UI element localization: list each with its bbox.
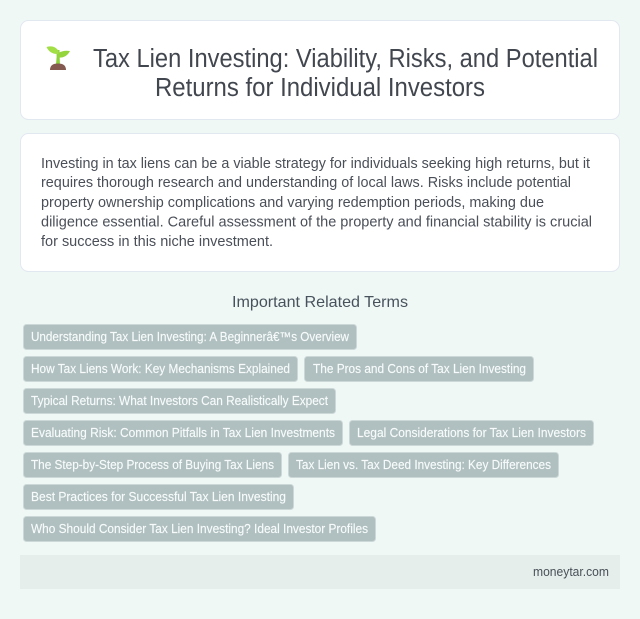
summary paragraph: Investing in tax liens can be a viable strategy for individuals seeking high returns, but it — [41, 155, 591, 172]
tag: step-by-step — [24, 452, 282, 478]
tag: typical returns — [24, 388, 336, 414]
tag: evaluating risk — [24, 420, 342, 446]
tag list — [24, 324, 594, 542]
tag: pros and cons: The Pros and Cons of Tax Lien Investing — [313, 362, 526, 376]
tag: best practices: Best Practices for Successful Tax Lien Investing — [31, 490, 286, 504]
tag: how tax liens work: How Tax Liens Work: Key Mechanisms Explained — [31, 362, 290, 376]
heading: important related terms: Important Related Terms — [232, 294, 408, 311]
tag: lien vs deed: Tax Lien vs. Tax Deed Investing: Key Differences — [296, 458, 551, 472]
tag: legal considerations: Legal Considerations for Tax Lien Investors — [357, 426, 586, 440]
tag: how tax liens work — [24, 356, 298, 382]
tag: best practices — [24, 484, 294, 510]
summary paragraph: property ownership complications and varying redemption periods, making due — [41, 194, 544, 211]
tag: lien vs deed — [288, 452, 558, 478]
summary paragraph: diligence essential. Careful assessment of the property and financial stability is crucial — [41, 214, 592, 230]
summary paragraph: for success in this niche investment. — [41, 233, 273, 250]
footer: moneytar.com — [533, 564, 609, 579]
panel: title card — [20, 20, 620, 120]
footer — [20, 555, 620, 589]
tag: who should consider: Who Should Consider Tax Lien Investing? Ideal Investor Profiles — [31, 522, 368, 536]
title — [93, 45, 598, 102]
tag: pros and cons — [304, 356, 534, 382]
title: Returns for Individual Investors — [155, 74, 485, 102]
tag: step-by-step: The Step-by-Step Process of Buying Tax Liens — [31, 458, 274, 472]
title: Tax Lien Investing: Viability, Risks, and Potential — [93, 45, 598, 73]
tag: typical returns: Typical Returns: What Investors Can Realistically Expect — [31, 394, 328, 408]
tag: evaluating risk: Evaluating Risk: Common Pitfalls in Tax Lien Investments — [31, 426, 335, 440]
panel: summary text card — [20, 134, 620, 272]
tag: legal considerations — [350, 420, 594, 446]
summary paragraph: requires thorough research and understanding of local laws. Risks include potential — [41, 174, 571, 191]
summary paragraph — [41, 155, 592, 250]
icon: seedling — [46, 46, 70, 70]
tag: who should consider — [24, 516, 376, 542]
tag: understanding: Understanding Tax Lien Investing: A Beginnerâ€™s Overview — [31, 330, 350, 344]
tag: understanding — [24, 324, 356, 350]
